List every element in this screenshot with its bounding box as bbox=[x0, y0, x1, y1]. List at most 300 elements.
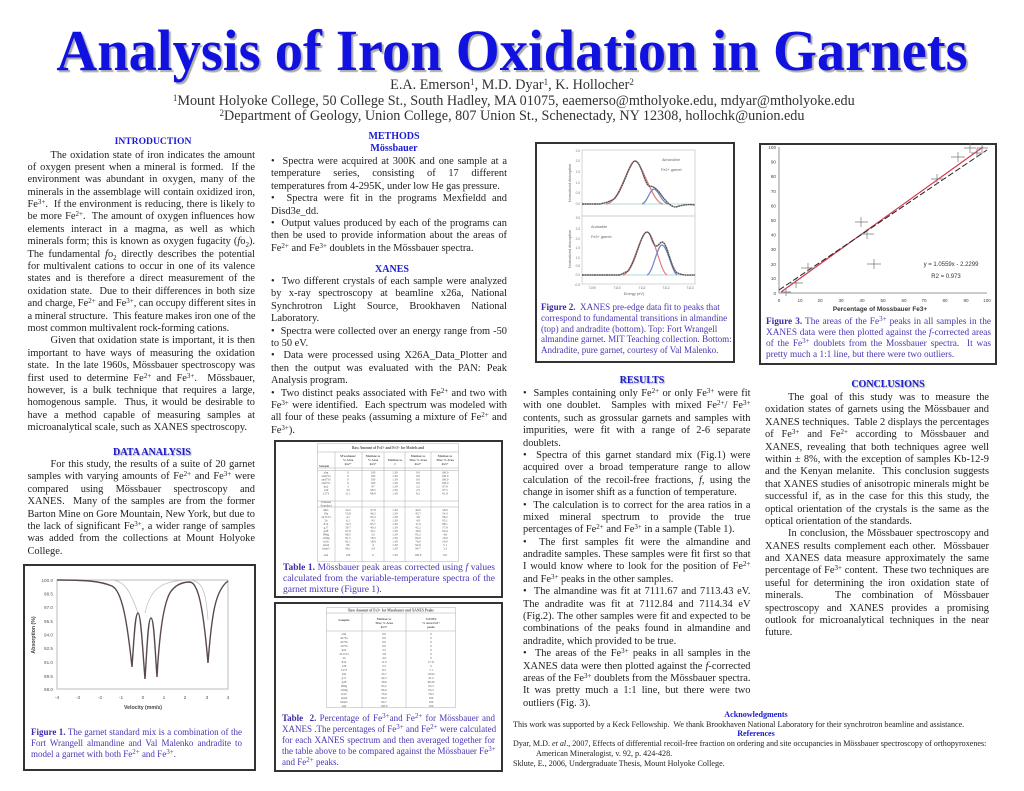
table 2: kbni5 bbox=[340, 700, 348, 704]
table 2: 11.9 bbox=[381, 660, 387, 664]
table 2: 100 bbox=[429, 696, 434, 700]
heading: data analysis: DATA ANALYSIS bbox=[113, 447, 191, 458]
text: introduction: however, is a bulk technique that requires a large, bbox=[28, 385, 255, 396]
text: conclusions: successful if, as in the case for this this study, the bbox=[765, 491, 989, 502]
text: references: Sklute, E., 2006, Undergraduate Thesis, Mount Holyoke College. bbox=[513, 759, 725, 768]
chart: Mossbauer spectrum: -4 bbox=[55, 695, 59, 701]
table 1: 1.39 bbox=[392, 515, 398, 519]
authors and affiliations: 1Mount Holyoke College, 50 College St., South Hadley, MA 01075, eaemerso@mtholyoke.edu, mdyar@mtholyoke.edu bbox=[173, 92, 855, 108]
text: introduction: Fe3+. If the environment is reducing, there is likely to bbox=[28, 198, 255, 210]
text: conclusions: within ± 8%, with the exception of samples Kb-12-9 bbox=[765, 454, 989, 465]
panel: table 2 bbox=[274, 602, 503, 772]
text: methods Mossbauer: • Output values produced by each of the programs can bbox=[271, 218, 507, 229]
text: methods Mossbauer: • Spectra were fit in the programs Mexfieldd and bbox=[271, 193, 507, 204]
table 1: % Area bbox=[343, 458, 354, 462]
table 1: 93 bbox=[371, 518, 375, 522]
text: results: contents, such as grossular garnets and samples with bbox=[523, 413, 750, 424]
table 2: 94.7 bbox=[381, 700, 387, 704]
text: introduction: The oxidation state of iron indicates the amount bbox=[50, 150, 255, 160]
text: results: • The calculation is to correct for the area ratios in a bbox=[523, 500, 750, 511]
text: methods XANES: Synchrotron Light Source, Brookhaven National bbox=[271, 301, 507, 312]
text: methods XANES: then the output was evaluated with the PAN: Peak bbox=[271, 363, 507, 374]
table 2: Mathau xs bbox=[377, 617, 392, 621]
text: results: • The first samples fit were the almandine and bbox=[523, 537, 750, 548]
table 1: 100.0 bbox=[442, 478, 449, 482]
chart: XANES vs Mossbauer scatter: 90 bbox=[771, 160, 776, 164]
text: results: • Samples containing only Fe2+ or only Fe3+ were fit bbox=[523, 387, 751, 399]
table 2: 81n bbox=[342, 660, 347, 664]
table 2: 84.0 bbox=[381, 688, 387, 692]
table 1: 4 bbox=[372, 543, 374, 547]
table 1: Unusual bbox=[321, 500, 331, 504]
text: results: doublets. bbox=[523, 438, 561, 449]
text: results: andradite samples. These samples were fit first so that bbox=[523, 549, 750, 560]
table 1: 3.8 bbox=[416, 515, 420, 519]
table 1: 0 bbox=[347, 474, 349, 478]
heading: acknowledgments: Acknowledgments bbox=[724, 710, 788, 719]
chart: XANES pre-edge spectra: 2.0 bbox=[576, 237, 580, 241]
text: data analysis: For this study, the results of a suite of 20 garnet bbox=[50, 459, 255, 470]
caption: figure 1 bbox=[31, 727, 242, 759]
text: results: andradite, which provided to be true. bbox=[523, 636, 676, 647]
table 1: 11.9 bbox=[415, 522, 421, 526]
caption: table 1 bbox=[283, 563, 495, 595]
text: data analysis: Barton Mine on Gore Mountain, New York, but due to bbox=[28, 509, 255, 520]
text: conclusions: of Fe3+ and Fe2+ according to Mössbauer and bbox=[765, 428, 989, 440]
chart: XANES pre-edge spectra: -0.5 bbox=[574, 283, 580, 287]
panel: figure 1: Velocity (mm/s) bbox=[124, 705, 162, 711]
caption: figure 3: Figure 3. The areas of the Fe3+ peaks in all samples in the bbox=[766, 315, 991, 327]
table 1: Mathau xs bbox=[366, 454, 381, 458]
table 1: 39.6 bbox=[415, 529, 421, 533]
chart: XANES pre-edge spectra: 2.5 bbox=[576, 149, 580, 153]
table 1: 45.7 bbox=[415, 512, 421, 516]
caption: table 1: calculated from the variable-temperature spectra of the bbox=[283, 574, 495, 584]
table 1: Sample bbox=[319, 464, 330, 468]
chart: Mossbauer spectrum: 0 bbox=[142, 695, 145, 701]
text: results: acquired over a broad temperature range to allow bbox=[523, 462, 750, 473]
text: introduction: and charge, Fe2+ and Fe3+, can occupy different sites in bbox=[28, 297, 256, 309]
chart: Mossbauer spectrum: 91.0 bbox=[44, 660, 53, 665]
table 2: 39.6 bbox=[381, 680, 387, 684]
table 2: 76.0 bbox=[381, 692, 387, 696]
text: conclusions: optical orientation of the crystals is the same as the bbox=[765, 504, 989, 515]
table 1: 24.0 bbox=[442, 540, 448, 544]
table 1: and75c bbox=[322, 481, 331, 485]
table 1: 100 bbox=[371, 474, 376, 478]
chart: XANES pre-edge spectra: 3.5 bbox=[576, 216, 580, 220]
text: conclusions: future. bbox=[765, 627, 792, 638]
table 2: 41.2 bbox=[428, 676, 434, 680]
table 1: 18.9 bbox=[370, 540, 376, 544]
text: methods XANES: Analysis program. bbox=[271, 375, 348, 386]
text: data analysis: the lack of significant Fe3+, a wider range of samples bbox=[28, 520, 255, 532]
table 1: 95.1 bbox=[442, 518, 448, 522]
text: conclusions: and XANES data measure approximately the same bbox=[765, 553, 989, 564]
table 1: 57.8 bbox=[442, 526, 448, 530]
table 1: 1.39 bbox=[392, 470, 398, 474]
table 2: 7.1 bbox=[429, 668, 433, 672]
table 1: 100.0 bbox=[415, 553, 422, 557]
text: conclusions: percentage of Fe3+ content. These two techniques are bbox=[765, 564, 989, 576]
table 1: True % Area bbox=[409, 458, 427, 462]
table 1: 96.1 bbox=[345, 546, 351, 550]
table 1: Mathau xs bbox=[388, 458, 403, 462]
table 1: 56.0 bbox=[442, 508, 448, 512]
table 1: kt1b bbox=[323, 540, 329, 544]
chart: Mossbauer spectrum: 100.0 bbox=[42, 578, 53, 583]
chart: Mossbauer spectrum: 95.5 bbox=[44, 619, 53, 624]
chart: Mossbauer spectrum: 2 bbox=[184, 695, 187, 701]
table 2: 4.9 bbox=[382, 656, 386, 660]
table 1: 76.0 bbox=[415, 540, 421, 544]
table 1: Mix bbox=[323, 508, 329, 512]
caption: table 1: Table 1. Mössbauer peak areas corrected using f values bbox=[283, 563, 495, 573]
table 1: 0 bbox=[347, 478, 349, 482]
text: introduction: state. In the late 1960s, Mössbauer spectroscopy was bbox=[28, 360, 255, 371]
table 1: 1.39 bbox=[392, 546, 398, 550]
chart: XANES vs Mossbauer scatter: 80 bbox=[942, 298, 948, 303]
text: results: areas of the Fe3+ doublets from the Mössbauer spectra. bbox=[523, 672, 750, 684]
table 1: 67.9 bbox=[345, 529, 351, 533]
table 1: 2b bbox=[324, 518, 328, 522]
chart: XANES vs Mossbauer scatter: 50 bbox=[771, 218, 776, 223]
table 1: 1.39 bbox=[392, 540, 398, 544]
text: introduction: oxidation state. Due to their differences in both size bbox=[28, 286, 255, 297]
chart: Mossbauer spectrum: 97.0 bbox=[44, 605, 53, 610]
table 2: 0 bbox=[430, 652, 432, 656]
caption: figure 2 bbox=[541, 302, 732, 355]
text: methods XANES: • Two distinct peaks associated with Fe2+ and two with bbox=[271, 387, 507, 399]
chart: Mossbauer spectrum: -2 bbox=[98, 695, 102, 701]
table 2: 0.0 bbox=[382, 644, 386, 648]
table 2: peaks bbox=[427, 625, 436, 629]
chart: XANES vs Mossbauer scatter: 0 bbox=[773, 291, 776, 296]
chart: XANES vs Mossbauer scatter: 40 bbox=[771, 232, 776, 238]
chart: XANES vs Mossbauer scatter: 20 bbox=[771, 262, 776, 267]
table 2: 42.2 bbox=[381, 676, 387, 680]
table 2: kn2 bbox=[342, 648, 347, 652]
text: results: percentages of Fe2+ and Fe3+ in a sample (Table 1). bbox=[523, 523, 735, 535]
table 1: 1.39 bbox=[392, 474, 398, 478]
table 1: 59.7 bbox=[345, 526, 351, 530]
text: introduction: Given that oxidation state is important, it is then bbox=[50, 335, 255, 346]
chart: XANES pre-edge spectra: Normalized Absorption bbox=[568, 230, 572, 268]
table 2: Samples bbox=[338, 618, 350, 622]
table 1: 53.8 bbox=[345, 512, 351, 516]
table 1: 1.39 bbox=[392, 553, 398, 557]
table 1: Mathau xs bbox=[438, 454, 453, 458]
text: methods XANES bbox=[271, 276, 507, 436]
table 1: % Area bbox=[368, 458, 379, 462]
table 1: 0 bbox=[372, 553, 374, 557]
table 2: 0.0 bbox=[382, 640, 386, 644]
chart: XANES vs Mossbauer scatter: 60 bbox=[901, 298, 907, 303]
table 2: ab1513 bbox=[339, 652, 349, 656]
table 1: 18.5 bbox=[370, 536, 376, 540]
chart: XANES pre-edge spectra: 7109 bbox=[588, 286, 596, 290]
table 1: and bbox=[324, 553, 329, 557]
chart: XANES vs Mossbauer scatter: 30 bbox=[771, 247, 776, 252]
chart: Mossbauer spectrum: 98.5 bbox=[44, 592, 53, 596]
heading: methods: Mössbauer bbox=[370, 143, 418, 154]
table 1: 42.2 bbox=[415, 526, 421, 530]
caption: figure 3 bbox=[766, 315, 991, 360]
caption: table 2: Table 2. Percentage of Fe3+and Fe2+ for Mössbauer and bbox=[282, 712, 495, 723]
chart: XANES pre-edge spectra: 2.5 bbox=[576, 227, 580, 231]
text: introduction: states and is therefore a direct measurement of the bbox=[28, 273, 255, 284]
text: introduction: first used to determine Fe2+ and Fe3+. Mössbauer, bbox=[28, 372, 255, 384]
chart: Mossbauer spectrum: Absorption (%) bbox=[31, 616, 37, 654]
chart: Mossbauer spectrum: 92.5 bbox=[44, 646, 53, 651]
table 2: 3.8 bbox=[382, 652, 386, 656]
text: introduction: most common multivalent rock-forming cations. bbox=[28, 323, 229, 334]
table 1: 40.3 bbox=[370, 526, 376, 530]
text: methods XANES: Fe3+). bbox=[271, 424, 295, 436]
caption: figure 1: Figure 1. The garnet standard mix is a combination of the bbox=[31, 727, 242, 737]
table 2: 0 bbox=[430, 664, 432, 668]
table 2: 2.2 bbox=[382, 648, 386, 652]
table 2: 0.0 bbox=[382, 632, 386, 636]
text: data analysis: compared using Mössbauer spectroscopy and bbox=[28, 484, 255, 495]
table 2: 94.9 bbox=[381, 696, 387, 700]
table 2: 0 bbox=[430, 648, 432, 652]
chart: Mossbauer spectrum: 88.0 bbox=[44, 687, 53, 692]
text: methods XANES: by x-ray spectroscopy at beamline x26a, National bbox=[271, 288, 507, 299]
table 2: 19.93 bbox=[428, 672, 435, 676]
chart: Mossbauer spectrum: 4 bbox=[227, 695, 230, 701]
heading: XANES: XANES bbox=[375, 264, 409, 275]
table 1: 32.1 bbox=[370, 529, 376, 533]
table 2: 0.0 bbox=[382, 636, 386, 640]
table 1: 1.39 bbox=[392, 478, 398, 482]
table 1: 1.39 bbox=[392, 526, 398, 530]
panel: table 1 bbox=[274, 440, 503, 598]
text: introduction: The fundamental fo2 directly describes the potential bbox=[28, 249, 255, 262]
table 1: 97.8 bbox=[442, 484, 448, 488]
table 1: 3 bbox=[347, 484, 349, 488]
text: references bbox=[513, 739, 986, 768]
table 2: 48.43 bbox=[428, 680, 435, 684]
caption: figure 3: XANES data were then plotted against the f-corrected areas bbox=[766, 328, 991, 338]
table 1: M'essbauer bbox=[340, 454, 356, 458]
chart: XANES vs Mossbauer scatter: 0 bbox=[778, 298, 781, 303]
text: data analysis: samples with varying amounts of Fe2+ and Fe3+ were bbox=[28, 470, 255, 482]
table 2: 0 bbox=[430, 640, 432, 644]
table 1: 0.0 bbox=[416, 474, 420, 478]
chart: XANES pre-edge spectra: 0.0 bbox=[576, 273, 580, 277]
heading: results: RESULTS bbox=[620, 375, 664, 386]
table 1: 0.0 bbox=[416, 481, 420, 485]
text: introduction: minerals in the assemblage will contain oxidized iron, bbox=[28, 187, 255, 198]
text: results: change in isomer shift as a function of temperature. bbox=[523, 487, 737, 498]
chart: XANES vs Mossbauer scatter: 50 bbox=[880, 298, 886, 303]
text: methods Mossbauer: temperature series, consisting of 17 different bbox=[271, 168, 507, 179]
chart: Mossbauer spectrum bbox=[31, 578, 230, 711]
table 1: 81n bbox=[324, 522, 329, 526]
table 1: 5.1 bbox=[443, 543, 447, 547]
text: references: Dyar, M.D. et al., 2007, Effects of differential recoil-free fraction on ordering and site occupancies in Mössbauer spectroscopy of orthopyroxenes: bbox=[513, 739, 986, 748]
caption: figure 3: pretty much a 1:1 line, but there were two outliers. bbox=[766, 350, 954, 360]
chart: XANES vs Mossbauer scatter: 90 bbox=[963, 298, 969, 303]
table 1: 2.5 bbox=[416, 488, 420, 492]
table 1: 100.0 bbox=[442, 474, 449, 478]
chart: XANES vs Mossbauer scatter bbox=[768, 143, 991, 313]
table 1: 4.7 bbox=[346, 515, 350, 519]
table 1: 1.39 bbox=[392, 508, 398, 512]
table 2: % Area Fe3+ bbox=[422, 621, 440, 625]
table 1: 1160g bbox=[322, 536, 330, 540]
text: introduction bbox=[28, 150, 256, 433]
text: introduction: environment was abundant in oxygen, many of the bbox=[28, 174, 255, 185]
table 1: 91.8 bbox=[442, 492, 448, 496]
text: introduction: of oxygen present when a mineral is formed. If the bbox=[28, 162, 255, 173]
chart: XANES vs Mossbauer scatter: R2 = 0.973 bbox=[931, 274, 961, 280]
table 1: 11.1 bbox=[345, 492, 351, 496]
chart: XANES pre-edge spectra: Fe2+ garnet bbox=[661, 168, 683, 172]
text: results: calculation of the recoil-free fractions, f, using the bbox=[523, 475, 750, 486]
table 1: g28 bbox=[324, 529, 329, 533]
text: methods Mossbauer: • Spectra were acquired at 300K and one sample at a bbox=[271, 156, 507, 167]
chart: XANES pre-edge spectra: 7112 bbox=[662, 286, 670, 290]
table 1: and75b bbox=[321, 478, 331, 482]
table 2: 78.3 bbox=[428, 692, 434, 696]
text: methods Mossbauer: temperatures from 4-295K, under low He gas pressure. bbox=[271, 181, 500, 192]
table 1: 1.39 bbox=[392, 488, 398, 492]
table 1: 44.0 bbox=[415, 508, 421, 512]
caption: table 2: XANES .The percentages of Fe3+ and Fe2+ were calculated bbox=[282, 723, 496, 734]
table 2: and bbox=[342, 704, 347, 708]
table 2: 95.3 bbox=[428, 684, 434, 688]
table 2: 129 bbox=[342, 664, 347, 668]
table 2: 95.2 bbox=[381, 684, 387, 688]
text: data analysis: XANES. Many of the samples are from the former bbox=[28, 496, 255, 507]
text: conclusions: minerals. The combination of Mössbauer bbox=[765, 590, 989, 601]
chart: XANES vs Mossbauer scatter: y = 1.0559x - 2.2299 bbox=[924, 262, 979, 268]
table 1: 0.0 bbox=[416, 470, 420, 474]
chart: XANES vs Mossbauer scatter: 10 bbox=[797, 298, 803, 303]
text: methods XANES: • Spectra were collected over an energy range from -50 bbox=[271, 326, 507, 337]
chart: XANES pre-edge spectra: Andradite bbox=[591, 225, 607, 229]
chart: XANES pre-edge spectra: 7110 bbox=[613, 286, 621, 290]
text: introduction: homogenous sample. Thus, it would be desirable to bbox=[28, 397, 255, 408]
table 1: 4.9 bbox=[416, 518, 420, 522]
text: results: It was pretty much a 1:1 line, but there were two bbox=[523, 685, 750, 696]
table 1: 3.5 bbox=[346, 488, 350, 492]
chart: Mossbauer spectrum: -3 bbox=[76, 695, 80, 701]
chart: XANES pre-edge spectra: 2.0 bbox=[576, 159, 580, 163]
text: conclusions bbox=[765, 392, 989, 638]
table 1: Fe2+ bbox=[415, 462, 422, 466]
caption: figure 2: (top) and andradite (bottom). Top: Fort Wrangell bbox=[541, 324, 717, 334]
text: results: with one doublet. Samples with mixed Fe2+/ Fe3+ bbox=[523, 399, 750, 411]
table 2: Fe3+ bbox=[381, 625, 388, 629]
table 1: 1273 bbox=[323, 492, 330, 496]
text: methods XANES: Fe3+ were identified. Each spectrum was modeled with bbox=[271, 399, 507, 411]
table 1: Fe2+ bbox=[345, 462, 352, 466]
table 2: ab75b bbox=[340, 640, 348, 644]
chart: XANES vs Mossbauer scatter: 40 bbox=[859, 298, 865, 303]
table 1: 129 bbox=[324, 488, 329, 492]
table 1: 100 bbox=[371, 470, 376, 474]
table 1: 1.39 bbox=[392, 543, 398, 547]
chart: XANES vs Mossbauer scatter: 80 bbox=[771, 174, 776, 179]
panel: figure 3 bbox=[759, 143, 997, 365]
chart: XANES vs Mossbauer scatter: 60 bbox=[771, 204, 776, 208]
table 1: 0 bbox=[347, 470, 349, 474]
text: introduction: important to have ways of measuring the oxidation bbox=[28, 348, 255, 359]
text: methods XANES: all four of these peaks (assuming a mixture of Fe2+ and bbox=[271, 411, 507, 423]
table 2: Raw Amount of Fe3+ for Mossbauer and XANES Peaks bbox=[348, 608, 434, 612]
text: references: American Mineralogist, v. 92, p. 424-428. bbox=[536, 749, 672, 758]
table 1: 1.39 bbox=[392, 522, 398, 526]
table 1 bbox=[317, 443, 459, 562]
text: introduction: have a method capable of measuring samples at bbox=[28, 410, 255, 421]
table 1: Fe3+ bbox=[370, 462, 377, 466]
text: introduction: a mineral structure. This feature makes iron one of the bbox=[28, 311, 256, 322]
table 2: 18a bbox=[342, 672, 347, 676]
authors and affiliations bbox=[173, 77, 855, 124]
table 2: True % Area bbox=[375, 621, 393, 625]
table 1: 97.5 bbox=[442, 488, 448, 492]
table 1: 94.7 bbox=[415, 546, 421, 550]
chart: XANES pre-edge spectra bbox=[568, 149, 696, 296]
table 1: 2.2 bbox=[416, 484, 420, 488]
heading: introduction: INTRODUCTION bbox=[115, 136, 191, 147]
chart: XANES pre-edge spectra: Energy (eV) bbox=[624, 292, 645, 296]
table 1: 46.2 bbox=[370, 512, 376, 516]
text: methods XANES: • Data were processed using X26A_Data_Plotter and bbox=[271, 350, 507, 361]
text: results: XANES data were then plotted against the f-corrected bbox=[523, 661, 750, 672]
chart: XANES pre-edge spectra: 7111 bbox=[638, 286, 646, 290]
text: results: • The almandine was fit at 7111.67 and 7113.43 eV. bbox=[523, 586, 750, 597]
caption: figure 2: Andradite, pure garnet, courtesy of Val Malenko. bbox=[541, 345, 718, 355]
authors and affiliations: E.A. Emerson1, M.D. Dyar1, K. Hollocher2 bbox=[390, 77, 634, 93]
table 1: 0.0 bbox=[416, 478, 420, 482]
text: results: combinations of the peaks found in almandine and bbox=[523, 623, 750, 634]
table 1: 8.2 bbox=[416, 492, 420, 496]
table 1: True % Area bbox=[436, 458, 454, 462]
caption: figure 1: model a garnet with both Fe2+ and Fe3+. bbox=[31, 748, 176, 759]
chart: XANES pre-edge spectra: 1.0 bbox=[576, 256, 580, 260]
caption: figure 3: of the Fe3+ doublets from the Mossbauer spectra. It was bbox=[766, 337, 991, 349]
table 2: 100 bbox=[429, 704, 434, 708]
text: results: • Spectra of this garnet standard mix (Fig.1) were bbox=[523, 450, 750, 461]
caption: figure 2: Figure 2. XANES pre-edge data fit to peaks that bbox=[541, 302, 720, 312]
table 1: 16.0 bbox=[442, 536, 448, 540]
text: conclusions: The goal of this study was to measure the bbox=[788, 392, 989, 403]
table 1: 4.8 bbox=[443, 532, 447, 536]
chart: XANES pre-edge spectra: 1.5 bbox=[576, 170, 580, 174]
table 1: f bbox=[394, 462, 396, 466]
text: introduction: elements interact in a magma, as well as which bbox=[28, 224, 255, 235]
table 2: alm bbox=[342, 632, 347, 636]
table 2: 100.0 bbox=[381, 704, 388, 708]
table 2: 0 bbox=[430, 656, 432, 660]
text: conclusions: XANES techniques. Table 2 displays the percentages bbox=[765, 417, 989, 428]
table 1: 18a bbox=[324, 512, 329, 516]
text: results: mixed mineral spectrum to provide the true bbox=[523, 512, 750, 523]
table 2: 996g bbox=[341, 684, 348, 688]
text: conclusions: useful for determining the iron oxidation state of bbox=[765, 578, 989, 589]
chart: Mossbauer spectrum: 1 bbox=[163, 695, 166, 701]
table 1: 95.2 bbox=[415, 532, 421, 536]
text: methods XANES: • Two different crystals of each sample were analyzed bbox=[271, 276, 507, 287]
table 1: alm4 bbox=[323, 543, 330, 547]
table 1: 1.39 bbox=[392, 484, 398, 488]
table 1: 96.2 bbox=[442, 515, 448, 519]
chart: XANES pre-edge spectra: 0.5 bbox=[576, 264, 580, 268]
